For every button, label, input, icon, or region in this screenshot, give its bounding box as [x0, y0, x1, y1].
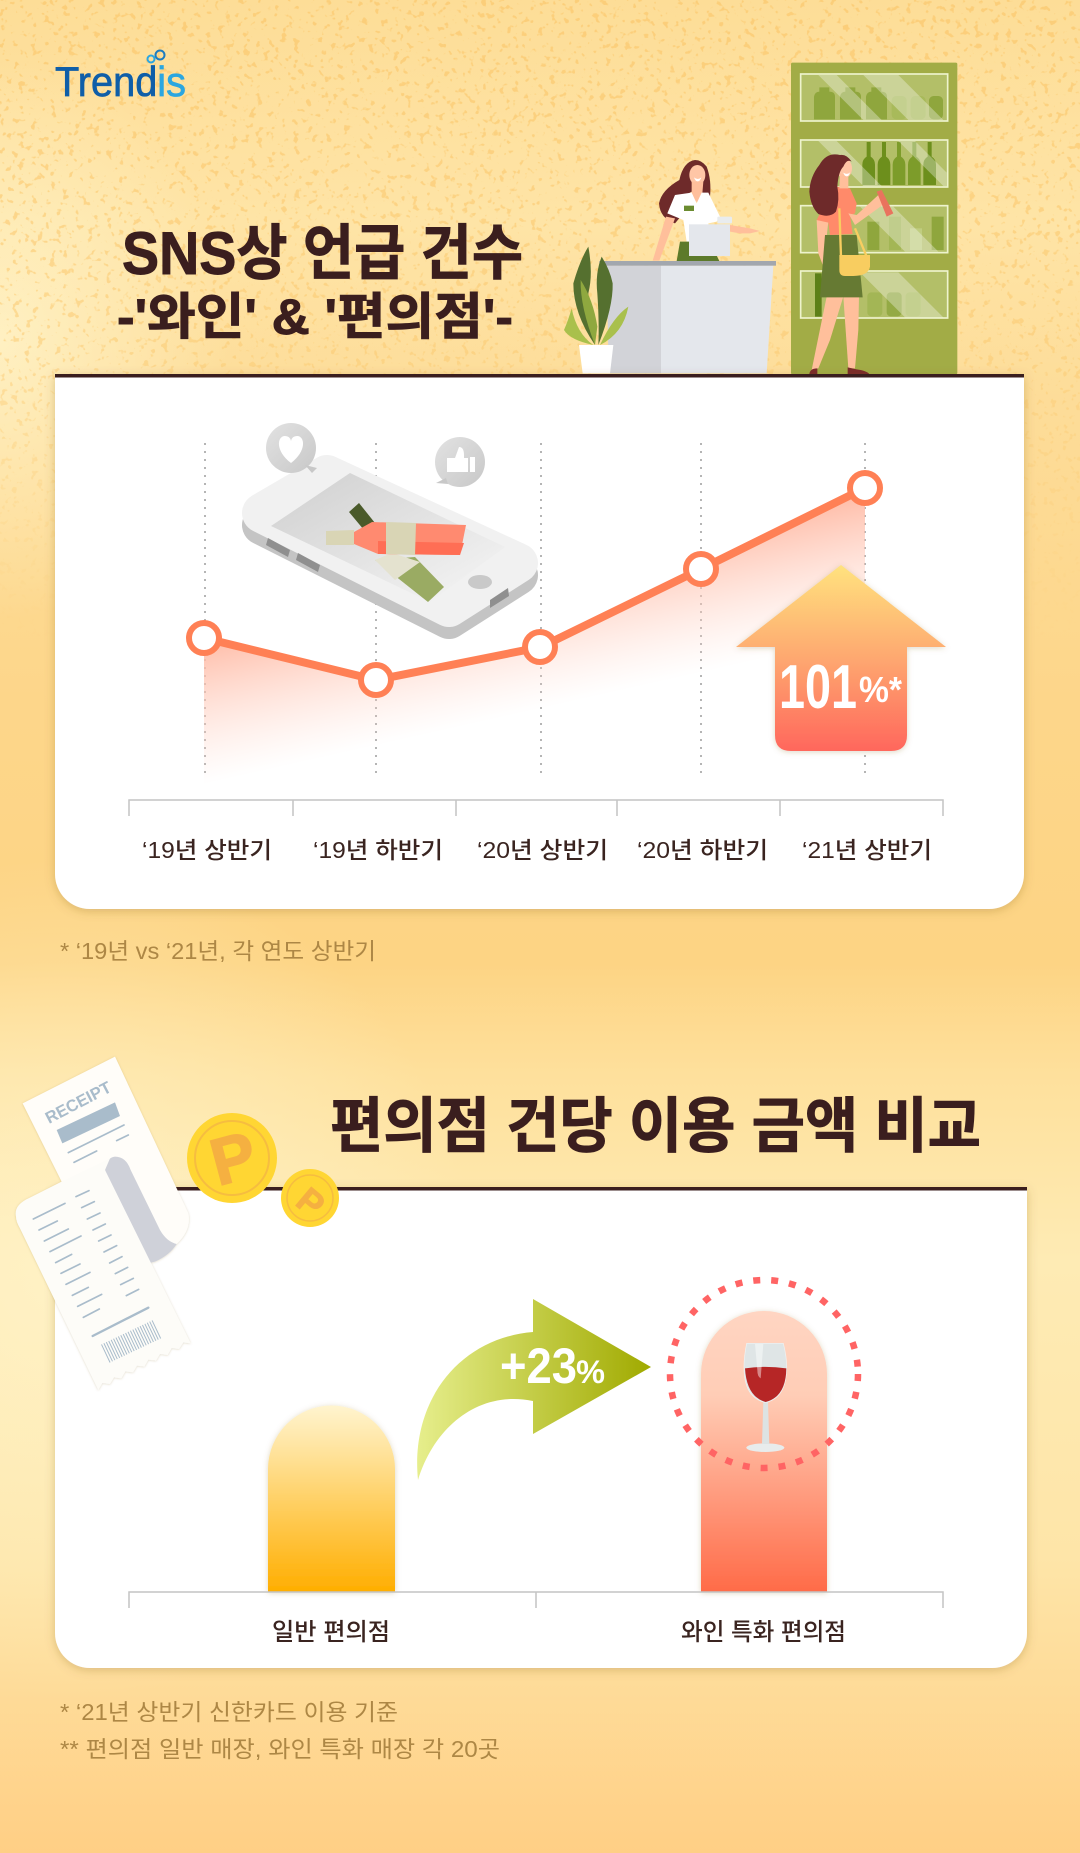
icon: wine glass: [744, 1343, 787, 1452]
icon: thumbs up bubble: [435, 437, 485, 487]
title: SNS mentions: [117, 220, 523, 345]
icon: large point coin: [187, 1113, 277, 1203]
arrow: +23%: %: [576, 1354, 605, 1390]
shopper: [809, 154, 893, 374]
title: SNS mentions: -'와인' & '편의점'-: [117, 289, 513, 345]
callout: up arrow 101%: %*: [859, 669, 902, 710]
footnotes: data source: [60, 1699, 500, 1762]
arrow: +23%: +23: [500, 1338, 577, 1394]
icon: receipt: [16, 1057, 191, 1390]
plant: [564, 247, 628, 373]
callout: up arrow 101%: 101: [779, 653, 857, 722]
axis labels: 와인 특화 편의점: [681, 1619, 846, 1646]
axis labels: 일반 편의점: [272, 1619, 390, 1646]
axis labels: ‘19년 하반기: [313, 837, 443, 863]
line series: [204, 488, 865, 680]
title: spend per convenience store visit: 편의점 건당 이용 금액 비교: [330, 1093, 981, 1160]
data points: [189, 473, 880, 695]
x axis: [129, 800, 943, 816]
x axis: [129, 1592, 943, 1608]
icon: large point coin: P: [202, 1117, 264, 1200]
title: SNS mentions: SNS상 언급 건수: [122, 220, 523, 287]
panel: spend bar chart: [55, 1187, 1027, 1668]
axis labels: ‘20년 상반기: [477, 837, 608, 863]
axis labels: [142, 837, 932, 863]
icon: small point coin: P: [289, 1180, 332, 1225]
icon: receipt: RECEIPT: [42, 1078, 114, 1128]
logo: Trendis: Trendis: [55, 58, 186, 105]
axis labels: ‘20년 하반기: [637, 837, 768, 863]
axis labels: [272, 1619, 846, 1646]
footnotes: data source: ** 편의점 일반 매장, 와인 특화 매장 각 20곳: [60, 1736, 500, 1762]
axis labels: ‘19년 상반기: [142, 837, 272, 863]
dashed highlight circle: [670, 1280, 858, 1468]
axis labels: ‘21년 상반기: [802, 837, 932, 863]
counter: [599, 261, 776, 373]
cashier: [653, 160, 760, 261]
icon: phone with wine bottles: [262, 473, 518, 619]
icon: small point coin: [281, 1169, 339, 1227]
footnotes: data source: * ‘21년 상반기 신한카드 이용 기준: [60, 1699, 398, 1725]
shelf cabinet: [791, 63, 957, 374]
chart area fill: [204, 488, 865, 790]
bar: general store: [268, 1406, 395, 1592]
callout: up arrow 101%: [736, 565, 946, 751]
footnote: comparison basis: * ‘19년 vs ‘21년, 각 연도 상반기: [60, 938, 376, 964]
chart grid dotted lines: [205, 443, 865, 777]
bar: wine specialty store: [701, 1311, 827, 1592]
icon: heart bubble: [266, 423, 317, 473]
panel: SNS mentions line chart: [55, 374, 1024, 909]
arrow: +23%: [417, 1299, 651, 1480]
illustration: store scene with counter, shelf, cashier, shopper, plant: [564, 63, 957, 374]
